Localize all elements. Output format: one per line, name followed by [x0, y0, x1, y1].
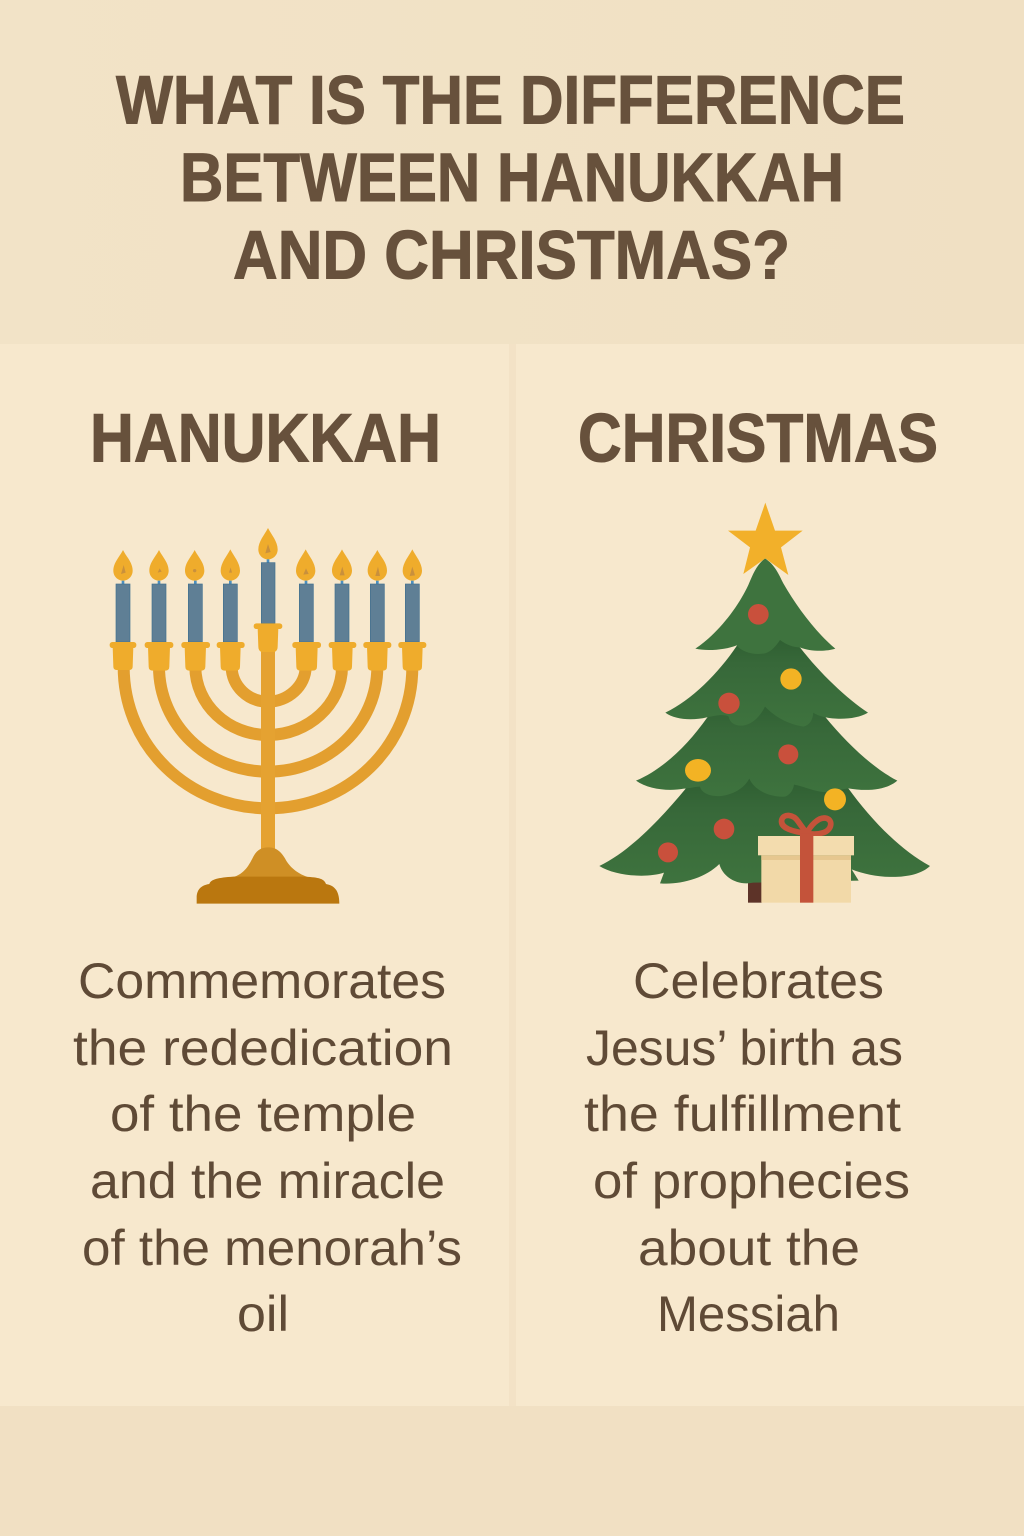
- title: WHAT IS THE DIFFERENCE: [116, 62, 905, 138]
- ornaments: [658, 604, 846, 862]
- text: Christmas description: of prophecies: [593, 1153, 910, 1209]
- icon: menorah: [110, 528, 426, 904]
- panel: Hanukkah: [0, 344, 509, 1406]
- heading: Christmas: CHRISTMAS: [578, 400, 938, 476]
- text: Hanukkah description: and the miracle: [90, 1153, 445, 1209]
- text: Hanukkah description: [73, 953, 462, 1342]
- heading: Hanukkah: HANUKKAH: [90, 400, 441, 476]
- text: Christmas description: Messiah: [657, 1286, 840, 1342]
- title: [116, 62, 905, 294]
- icon: gift box: [758, 815, 854, 903]
- text: Christmas description: the fulfillment: [584, 1086, 901, 1142]
- title: BETWEEN HANUKKAH: [180, 139, 844, 216]
- text: Hanukkah description: of the temple: [110, 1086, 416, 1142]
- icon: star: [728, 503, 803, 575]
- icon: Christmas tree with gift: [599, 503, 930, 903]
- text: Hanukkah description: of the menorah’s: [82, 1220, 462, 1276]
- text: Christmas description: Celebrates: [633, 953, 884, 1009]
- background: header band: [0, 0, 1024, 344]
- text: Christmas description: Jesus’ birth as: [586, 1020, 903, 1076]
- title: AND CHRISTMAS?: [233, 216, 790, 294]
- text: Christmas description: [584, 953, 910, 1342]
- text: Hanukkah description: oil: [237, 1286, 289, 1342]
- panel: Christmas: [516, 344, 1024, 1406]
- text: Christmas description: about the: [638, 1220, 860, 1276]
- text: Hanukkah description: the rededication: [73, 1020, 453, 1076]
- background: footer band: [0, 1406, 1024, 1536]
- background: center gutter: [509, 344, 516, 1406]
- text: Hanukkah description: Commemorates: [78, 953, 446, 1009]
